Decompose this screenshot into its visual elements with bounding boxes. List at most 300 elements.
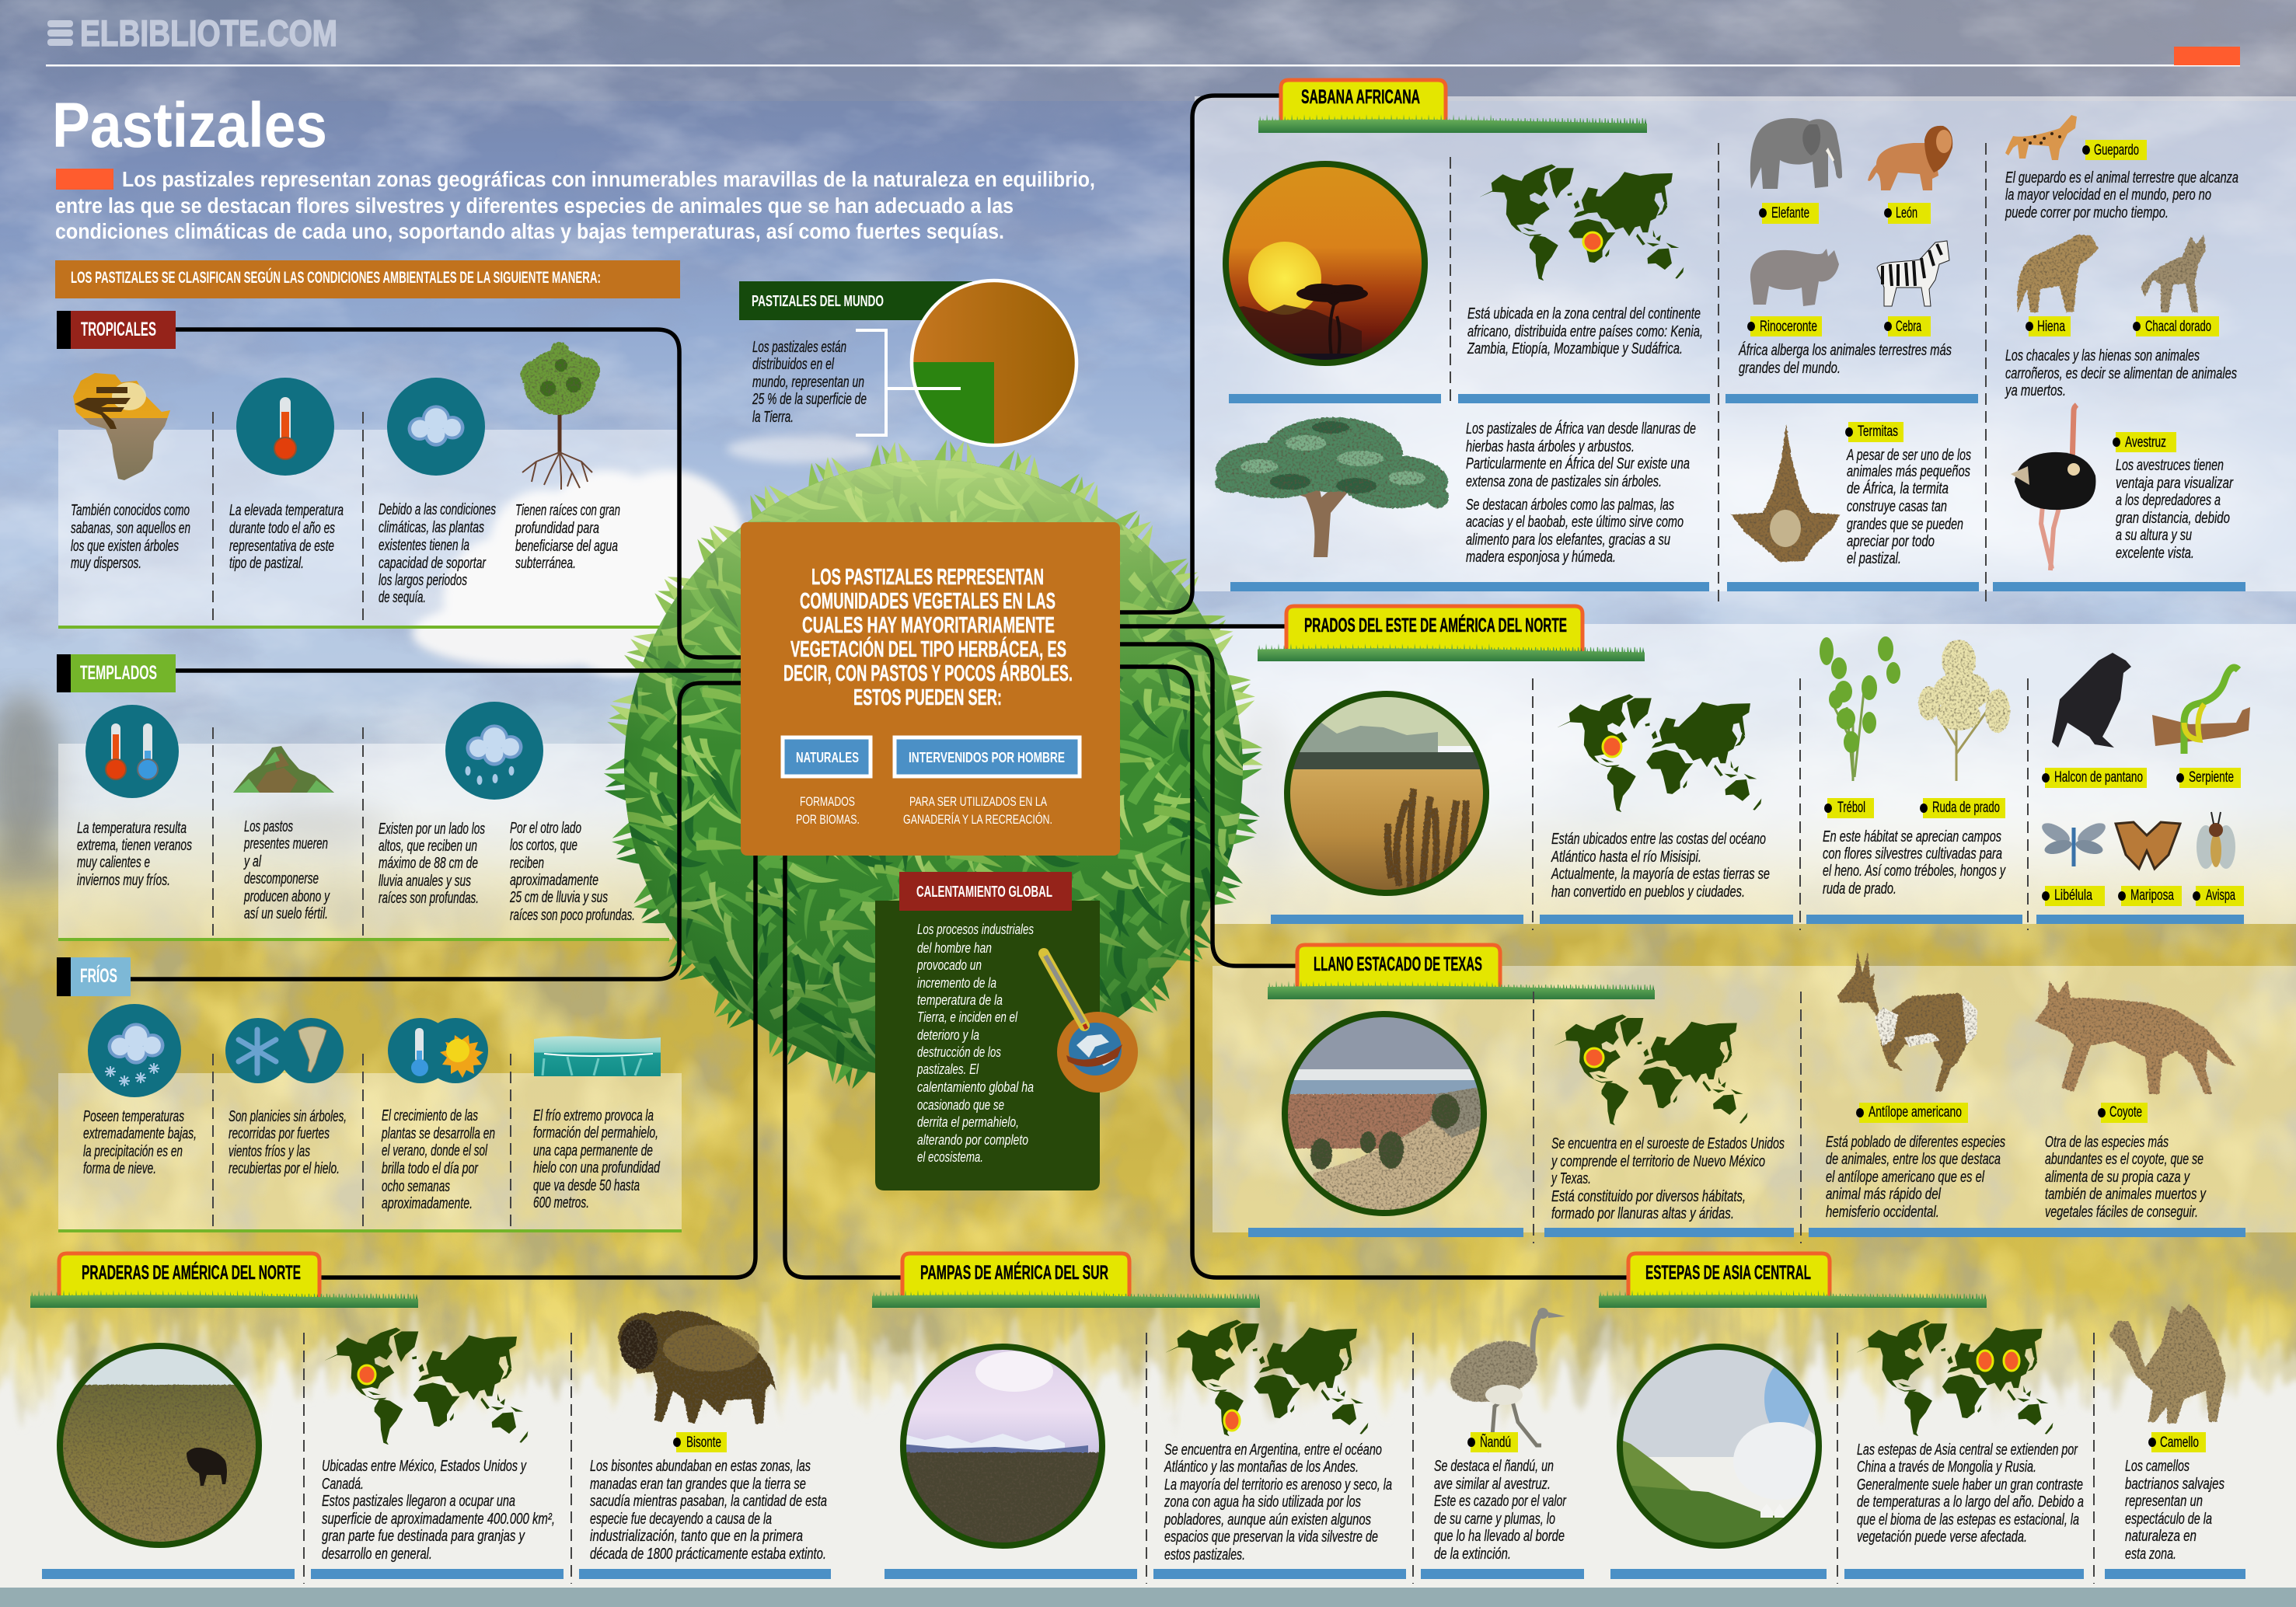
- header rule and accent: [46, 47, 2240, 67]
- text: ubicación prados: han convertido en pueblos y ciudades.: [1551, 884, 1745, 901]
- icon: cheetah: [2005, 115, 2077, 160]
- central statement: VEGETACIÓN DEL TIPO HERBÁCEA, ES: [790, 636, 1066, 662]
- text: fríos 4: una capa permanente de: [533, 1142, 653, 1159]
- label: avestruz: [2113, 432, 2176, 452]
- text: coyote: vegetales fáciles de conseguir.: [2045, 1204, 2198, 1221]
- icon: rain cloud circle: [445, 702, 543, 800]
- photo: mesa landscape: [1279, 1010, 1491, 1220]
- text: calentamiento: [916, 922, 1034, 1165]
- text: templados 4: los cortos, que: [510, 837, 577, 854]
- label: bisonte: [673, 1432, 727, 1452]
- text: templados 1: muy calientes e: [77, 854, 150, 871]
- text: fríos 3: ocho semanas: [382, 1178, 450, 1195]
- text: antílope: Está poblado de diferentes especies: [1826, 1134, 2005, 1151]
- tag: templados: TEMPLADOS: [80, 662, 157, 684]
- button: intervenidos por hombre: [895, 737, 1080, 776]
- text: 25 percent: distribuidos en el: [752, 356, 834, 373]
- tag: pampas: [872, 1253, 1260, 1308]
- text: calentamiento: el ecosistema.: [917, 1149, 983, 1165]
- text: ñandú: ave similar al avestruz.: [1434, 1476, 1551, 1493]
- text: ubicación praderas: desarrollo en general.: [322, 1546, 432, 1563]
- label: chacal dorado: Chacal dorado: [2145, 319, 2211, 335]
- text: 25 percent: Los pastizales están: [752, 339, 846, 356]
- map: argentina: [1164, 1319, 1368, 1436]
- text: ubicación pampas: Atlántico y las montañas de los Andes.: [1164, 1459, 1359, 1476]
- text: templados 3: máximo de 88 cm de: [379, 855, 478, 872]
- label: camello: Camello: [2160, 1434, 2199, 1451]
- tag: tropicales: [57, 311, 176, 349]
- text: tropicales 3: [379, 501, 496, 606]
- icon: termite mound: [1731, 424, 1840, 562]
- text: pastizales de áfrica: Se destacan árboles como las palmas, las: [1466, 497, 1674, 514]
- text: templados 1: inviernos muy fríos.: [77, 872, 170, 889]
- text: templados 1: [77, 820, 192, 889]
- text: camellos: representan un: [2125, 1493, 2203, 1510]
- text: fríos 1: la precipitación es en: [83, 1143, 183, 1160]
- text: fríos 1: [83, 1108, 197, 1177]
- blue bars: [1271, 915, 2244, 924]
- text: calentamiento: calentamiento global ha: [917, 1079, 1034, 1095]
- text: ubicación praderas: superficie de aproximadamente 400.000 km²,: [322, 1511, 555, 1528]
- text: tropicales 3: Debido a las condiciones: [379, 501, 496, 518]
- text: coyote: alimenta de su propia caza y: [2045, 1169, 2190, 1186]
- text: templados 2: presentes mueren: [243, 835, 328, 852]
- text: tropicales 4: subterránea.: [515, 555, 576, 572]
- text: ubicación praderas: Ubicadas entre México, Estados Unidos y: [322, 1458, 527, 1475]
- text: 25 percent: mundo, representan un: [752, 374, 864, 391]
- logo: ELBIBLIOTE.COM: [80, 12, 337, 54]
- photo: pampas with mountains: [898, 1340, 1108, 1552]
- text: calentamiento: deterioro y la: [917, 1027, 979, 1043]
- label: avispa: Avispa: [2206, 887, 2235, 904]
- text: formados por biomas: POR BIOMAS.: [796, 812, 860, 827]
- text: ubicación estepas: vegetación puede verse afectada.: [1857, 1529, 2027, 1546]
- text: ubicación estepas: Generalmente suele haber un gran contraste: [1857, 1476, 2083, 1494]
- tag: prados: [1258, 606, 1645, 661]
- text: templados 3: raíces son profundas.: [379, 890, 479, 907]
- text: ganadería y recreación: [903, 794, 1052, 827]
- text: guepardo: puede correr por mucho tiempo.: [2005, 204, 2169, 221]
- text: fríos 2: [229, 1108, 347, 1177]
- text: bisontes: década de 1800 prácticamente estaba extinto.: [590, 1546, 826, 1563]
- text: calentamiento: Los procesos industriales: [917, 922, 1034, 937]
- icon: two thermometers: [85, 705, 179, 798]
- text: formados por biomas: [796, 794, 860, 827]
- central statement: [783, 565, 1073, 710]
- text: flores silvestres: [1823, 828, 2006, 898]
- icon: permafrost ice: [534, 1036, 661, 1076]
- text: ñandú: que lo ha llevado al borde: [1434, 1528, 1565, 1545]
- icon: bactrian camel: [2109, 1304, 2226, 1424]
- blue bars: [42, 1569, 831, 1579]
- photo: prairie with bison: [54, 1340, 264, 1549]
- text: fríos 4: formación del permahielo,: [533, 1124, 658, 1142]
- label: hiena: [2026, 316, 2071, 336]
- text: ubicación estepas: que el bioma de las estepas es estacional, la: [1857, 1511, 2079, 1529]
- text: ubicación praderas: gran parte fue destinada para granjas y: [322, 1528, 525, 1545]
- button: naturales: [783, 737, 871, 776]
- icon: snake on branch: [2152, 668, 2250, 754]
- text: antílope: de animales, entre los que destaca: [1826, 1151, 2001, 1168]
- map: praderas: [323, 1327, 528, 1445]
- panel: templados: [57, 654, 635, 939]
- text: camellos: Los camellos: [2125, 1458, 2190, 1475]
- panel: sabana africana: [1215, 80, 2245, 601]
- text: avestruz: a su altura y su: [2116, 527, 2192, 544]
- icon: lion: [1868, 126, 1952, 190]
- text: ubicación llano: Está constituido por diversos hábitats,: [1551, 1188, 1746, 1205]
- icon: bison: [618, 1311, 776, 1424]
- text: bisontes: [590, 1458, 827, 1563]
- text: ubicación prados: Actualmente, la mayoría de estas tierras se: [1551, 866, 1770, 883]
- text: templados 2: así un suelo fértil.: [244, 905, 328, 922]
- grass globe: [588, 423, 1279, 1116]
- text: ubicación pampas: [1164, 1441, 1392, 1563]
- text: camellos: espectáculo de la: [2125, 1511, 2212, 1528]
- text: ñandú: Se destaca el ñandú, un: [1434, 1458, 1554, 1475]
- central box: [741, 522, 1120, 856]
- label: antílope americano: [1856, 1103, 1968, 1123]
- tag: calentamiento global: CALENTAMIENTO GLOBAL: [916, 884, 1052, 901]
- icon: marsh hawk: [2052, 653, 2131, 748]
- text: ñandú: de su carne y plumas, lo: [1434, 1511, 1555, 1528]
- label: libélula: [2042, 886, 2105, 906]
- text: avestruz: Los avestruces tienen: [2116, 457, 2224, 474]
- text: ubicación llano: Se encuentra en el suroeste de Estados Unidos: [1551, 1135, 1785, 1152]
- blue bars: [1248, 1228, 2245, 1237]
- label: avispa: [2193, 886, 2244, 906]
- text: carroñeros: ya muertos.: [2005, 382, 2066, 399]
- text: fríos 1: Poseen temperaturas: [83, 1108, 184, 1125]
- text: ubicación pampas: estos pastizales.: [1164, 1546, 1245, 1563]
- text: 25 percent: [752, 339, 867, 426]
- text: templados 4: 25 cm de lluvia y sus: [509, 889, 608, 906]
- text: coyote: [2045, 1134, 2207, 1221]
- text: ubicación: Zambia, Etiopía, Mozambique y Sudáfrica.: [1467, 340, 1683, 357]
- icon: hyena: [2017, 235, 2099, 312]
- tag: fríos: [57, 957, 131, 996]
- panel: pastizales del mundo: [739, 281, 1076, 445]
- text: fríos 3: el verano, donde el sol: [382, 1142, 487, 1159]
- text: tropicales 2: tipo de pastizal.: [229, 555, 304, 572]
- text: tropicales 3: de sequía.: [379, 589, 426, 606]
- text: tropicales 1: los que existen árboles: [71, 538, 179, 555]
- text: templados 2: y al: [243, 853, 261, 870]
- label: camello: [2148, 1432, 2206, 1452]
- text: tropicales 1: [71, 502, 190, 572]
- tag: estepas: [1599, 1253, 1987, 1308]
- icon: meadow rue: [1918, 640, 2010, 781]
- text: 25 percent: 25 % de la superficie de: [752, 391, 867, 408]
- text: tropicales 3: existentes tienen la: [379, 537, 469, 554]
- text: coyote: también de animales muertos y: [2045, 1186, 2207, 1203]
- label: mariposa: [2118, 886, 2182, 906]
- text: pastizales de áfrica: Los pastizales de África van desde llanuras de: [1466, 420, 1696, 437]
- tag: fríos: FRÍOS: [80, 964, 117, 987]
- text: tropicales 4: [515, 502, 620, 572]
- text: fríos 1: forma de nieve.: [83, 1160, 156, 1177]
- text: ubicación pampas: Se encuentra en Argentina, entre el océano: [1164, 1441, 1382, 1459]
- text: templados 2: Los pastos: [244, 818, 293, 835]
- label: termitas: Termitas: [1858, 424, 1898, 440]
- text: ganadería y recreación: PARA SER UTILIZADOS EN LA: [909, 794, 1047, 809]
- panel: llano estacado: [1248, 945, 2245, 1243]
- text: templados 4: [509, 820, 635, 924]
- central statement: LOS PASTIZALES REPRESENTAN: [811, 565, 1044, 590]
- text: ubicación praderas: Estos pastizales llegaron a ocupar una: [322, 1493, 515, 1510]
- text: pastizales de áfrica: madera esponjosa y húmeda.: [1466, 549, 1616, 566]
- text: ubicación praderas: Canadá.: [322, 1476, 364, 1493]
- tag: tropicales: TROPICALES: [81, 319, 156, 340]
- tag: estepas: ESTEPAS DE ASIA CENTRAL: [1645, 1262, 1811, 1284]
- intro text: condiciones climáticas de cada uno, soportando altas y bajas temperaturas, así como fuertes sequías.: [55, 219, 1004, 243]
- intro text: [55, 167, 1095, 243]
- label: ruda de prado: Ruda de prado: [1932, 800, 2000, 816]
- text: fríos 3: brilla todo el día por: [382, 1160, 479, 1177]
- tag: templados: [57, 654, 176, 692]
- text: templados 4: raíces son poco profundas.: [510, 907, 635, 924]
- text: fríos 3: plantas se desarrolla en: [381, 1125, 495, 1142]
- text: guepardo: [2005, 169, 2238, 221]
- label: avestruz: Avestruz: [2125, 434, 2166, 451]
- icon: clover: [1820, 636, 1900, 781]
- text: tropicales 2: representativa de este: [229, 538, 334, 555]
- blue bars: [885, 1569, 1584, 1579]
- label: hiena: Hiena: [2037, 319, 2065, 335]
- text: coyote: abundantes es el coyote, que se: [2045, 1151, 2204, 1168]
- icon: wasp: [2197, 812, 2235, 869]
- tag: praderas: [30, 1253, 418, 1308]
- icon: ostrich: [2011, 405, 2095, 570]
- label: bisonte: Bisonte: [686, 1434, 721, 1451]
- text: calentamiento: temperatura de la: [917, 992, 1003, 1008]
- text: termitas: de África, la termita: [1847, 479, 1949, 497]
- text: termitas: construye casas tan: [1847, 498, 1947, 515]
- tag: praderas: PRADERAS DE AMÉRICA DEL NORTE: [82, 1261, 301, 1284]
- text: templados 1: extrema, tienen veranos: [77, 837, 192, 854]
- text: camellos: esta zona.: [2125, 1546, 2176, 1563]
- text: templados 3: lluvia anuales y sus: [379, 873, 471, 890]
- text: ñandú: de la extinción.: [1434, 1546, 1511, 1563]
- label: coyote: Coyote: [2109, 1104, 2142, 1121]
- tag: pastizales del mundo: PASTIZALES DEL MUNDO: [752, 293, 884, 310]
- text: camellos: naturaleza en: [2125, 1528, 2197, 1545]
- text: carroñeros: [2005, 347, 2237, 399]
- text: bisontes: industrialización, tanto que en la primera: [590, 1528, 803, 1545]
- central statement: ESTOS PUEDEN SER:: [853, 685, 1002, 710]
- label: león: [1884, 203, 1931, 224]
- tag: pampas: PAMPAS DE AMÉRICA DEL SUR: [920, 1261, 1108, 1284]
- text: antílope: [1826, 1134, 2005, 1221]
- text: tropicales 4: beneficiarse del agua: [515, 538, 618, 555]
- text: ubicación praderas: [322, 1458, 555, 1563]
- text: calentamiento: del hombre han: [917, 940, 992, 956]
- text: templados 4: reciben: [510, 855, 544, 872]
- text: pastizales de áfrica: extensa zona de pastizales sin árboles.: [1466, 473, 1662, 490]
- label: cebra: [1884, 316, 1931, 336]
- text: tropicales 4: profundidad para: [515, 520, 599, 537]
- text: grandes animales: grandes del mundo.: [1739, 360, 1841, 377]
- panel: estepas de asia central: [1599, 1253, 2245, 1584]
- bracket: [856, 330, 961, 435]
- text: formados por biomas: FORMADOS: [800, 794, 855, 809]
- map: asia central: [1855, 1319, 2053, 1436]
- icon: golden jackal: [2141, 235, 2206, 312]
- central statement: DECIR, CON PASTOS Y POCOS ÁRBOLES.: [783, 660, 1073, 686]
- text: grandes animales: [1738, 341, 1952, 377]
- text: tropicales 3: capacidad de soportar: [379, 555, 487, 572]
- icon: snow cloud circle: [88, 1004, 181, 1097]
- panel: prados del este: [1258, 606, 2250, 930]
- icon: coyote: [2035, 981, 2235, 1094]
- label: termitas: [1845, 422, 1903, 442]
- icon: earth and thermometer: [1044, 953, 1138, 1093]
- icon: tree with roots: [521, 342, 600, 490]
- text: templados 2: descomponerse: [244, 870, 319, 887]
- tag: pastizales del mundo: [739, 281, 972, 320]
- text: calentamiento: derrita el permahielo,: [917, 1114, 1019, 1130]
- text: guepardo: la mayor velocidad en el mundo, pero no: [2005, 186, 2211, 204]
- map: texas: [1553, 1014, 1747, 1125]
- icon: acacia tree: [1215, 417, 1449, 557]
- panel: calentamiento global: [875, 872, 1138, 1190]
- text: pastizales de áfrica: alimento para los elefantes, gracias a su: [1466, 532, 1670, 549]
- label: cebra: Cebra: [1896, 319, 1921, 335]
- icon: dragonfly: [2039, 819, 2109, 866]
- text: termitas: el pastizal.: [1847, 550, 1901, 567]
- button: intervenidos por hombre: INTERVENIDOS POR HOMBRE: [909, 750, 1065, 765]
- label: trébol: [1824, 798, 1874, 818]
- text: flores silvestres: con flores silvestres cultivadas para: [1823, 845, 2002, 863]
- text: ubicación llano: y comprende el territorio de Nuevo México: [1551, 1153, 1765, 1170]
- text: ubicación pampas: espacios que preservan la vida silvestre de: [1164, 1529, 1378, 1546]
- text: fríos 4: [533, 1107, 661, 1211]
- text: ubicación estepas: China a través de Mongolia y Rusia.: [1857, 1459, 2036, 1476]
- text: flores silvestres: el heno. Así como tréboles, hongos y: [1823, 863, 2006, 880]
- text: termitas: apreciar por todo: [1847, 533, 1935, 550]
- text: tropicales 1: También conocidos como: [71, 502, 190, 519]
- text: calentamiento: ocasionado que se: [917, 1097, 1004, 1113]
- label: trébol: Trébol: [1837, 800, 1865, 816]
- text: fríos 2: Son planicies sin árboles,: [229, 1108, 347, 1125]
- classification banner: [55, 260, 680, 298]
- text: bisontes: sacudía mientras pasaban, la cantidad de esta: [590, 1493, 827, 1510]
- panel: fríos: [57, 957, 661, 1230]
- text: antílope: animal más rápido del: [1826, 1186, 1941, 1203]
- text: ñandú: Este es cazado por el valor: [1434, 1493, 1567, 1510]
- text: fríos 3: [381, 1107, 495, 1212]
- text: ubicación estepas: Las estepas de Asia central se extienden por: [1857, 1441, 2078, 1459]
- text: avestruz: ventaja para visualizar: [2116, 475, 2234, 492]
- text: termitas: [1846, 447, 1971, 567]
- label: guepardo: Guepardo: [2094, 142, 2139, 159]
- photo: meadow: [1282, 688, 1492, 901]
- text: tropicales 2: La elevada temperatura: [229, 502, 344, 519]
- text: tropicales 3: los largos periodos: [379, 572, 467, 589]
- tag: calentamiento global: [899, 872, 1072, 911]
- text: templados 3: [379, 821, 485, 907]
- text: ubicación prados: [1551, 831, 1770, 901]
- text: fríos 2: vientos fríos y las: [229, 1143, 310, 1160]
- text: ubicación estepas: [1857, 1441, 2084, 1546]
- text: ganadería y recreación: GANADERÍA Y LA RECREACIÓN.: [903, 812, 1052, 827]
- tag: llano estacado: [1268, 945, 1655, 999]
- panel: tropicales: [57, 311, 620, 626]
- central statement: CUALES HAY MAYORITARIAMENTE: [802, 613, 1055, 638]
- text: termitas: animales más pequeños: [1847, 463, 1970, 480]
- icon: rhea: [1442, 1308, 1565, 1452]
- photo: sunset acacia: [1220, 159, 1430, 378]
- text: avestruz: a los depredadores a: [2116, 492, 2221, 509]
- text: ubicación llano: formado por llanuras altas y áridas.: [1551, 1205, 1734, 1222]
- text: fríos 3: El crecimiento de las: [382, 1107, 478, 1124]
- icon: elephant: [1750, 118, 1842, 189]
- text: pastizales de áfrica: Particularmente en África del Sur existe una: [1466, 455, 1690, 472]
- text: tropicales 1: muy dispersos.: [71, 555, 141, 572]
- text: termitas: A pesar de ser uno de los: [1846, 447, 1971, 464]
- text: 25 percent: la Tierra.: [752, 409, 794, 426]
- text: flores silvestres: ruda de prado.: [1823, 880, 1896, 898]
- text: flores silvestres: En este hábitat se aprecian campos: [1823, 828, 2001, 845]
- text: tropicales 2: durante todo el año es: [229, 520, 335, 537]
- text: fríos 4: que va desde 50 hasta: [533, 1177, 640, 1194]
- intro text: Los pastizales representan zonas geográficas con innumerables maravillas de la naturaleza en equilibrio,: [122, 167, 1095, 191]
- text: ubicación prados: Están ubicados entre las costas del océano: [1551, 831, 1766, 848]
- map: africa: [1478, 164, 1684, 281]
- tag: prados: PRADOS DEL ESTE DE AMÉRICA DEL NORTE: [1304, 614, 1567, 636]
- label: ñandú: Ñandú: [1480, 1434, 1511, 1451]
- text: templados 2: producen abono y: [243, 888, 330, 905]
- text: ubicación llano: [1551, 1135, 1785, 1222]
- text: tropicales 4: Tienen raíces con gran: [515, 502, 620, 519]
- text: fríos 4: 600 metros.: [533, 1194, 589, 1211]
- text: ubicación: [1467, 305, 1703, 357]
- label: chacal dorado: [2133, 316, 2219, 336]
- text: ubicación pampas: zona con agua ha sido utilizada por los: [1164, 1494, 1361, 1511]
- text: avestruz: [2116, 457, 2234, 562]
- text: bisontes: manadas eran tan grandes que la tierra se: [590, 1476, 806, 1493]
- text: ubicación: africano, distribuida entre países como: Kenia,: [1467, 323, 1703, 340]
- connector lines: [131, 96, 1627, 1278]
- text: pastizales de áfrica: hierbas hasta árboles y arbustos.: [1466, 438, 1635, 455]
- text: calentamiento: Tierra, e inciden en el: [917, 1009, 1018, 1025]
- text: templados 3: Existen por un lado los: [379, 821, 485, 838]
- text: bisontes: especie fue decayendo a causa de la: [590, 1511, 772, 1528]
- label: león: León: [1896, 205, 1917, 221]
- icon: zebra: [1877, 241, 1949, 306]
- text: tropicales 3: climáticas, las plantas: [379, 519, 484, 536]
- text: ubicación: Está ubicada en la zona central del continente: [1467, 305, 1701, 322]
- text: bisontes: Los bisontes abundaban en estas zonas, las: [590, 1458, 811, 1475]
- text: templados 3: altos, que reciben un: [379, 838, 477, 855]
- blue bars: [1610, 1569, 2245, 1579]
- text: templados 2: [243, 818, 330, 922]
- text: ubicación llano: y Texas.: [1551, 1170, 1591, 1187]
- text: calentamiento: destrucción de los: [917, 1044, 1001, 1060]
- label: halcón de pantano: [2042, 768, 2147, 788]
- tag: sabana africana: SABANA AFRICANA: [1301, 86, 1420, 108]
- footer strip: [0, 1588, 2296, 1607]
- text: antílope: hemisferio occidental.: [1826, 1204, 1939, 1221]
- icon: mountain: [233, 746, 334, 793]
- label: ñandú: [1467, 1432, 1518, 1452]
- photo: steppe: [1615, 1340, 1827, 1556]
- text: pastizales de áfrica: [1466, 420, 1696, 566]
- text: calentamiento: alterando por completo: [917, 1132, 1028, 1148]
- label: mariposa: Mariposa: [2130, 887, 2174, 904]
- label: rinoceronte: Rinoceronte: [1760, 319, 1817, 335]
- text: templados 4: aproximadamente: [510, 872, 598, 889]
